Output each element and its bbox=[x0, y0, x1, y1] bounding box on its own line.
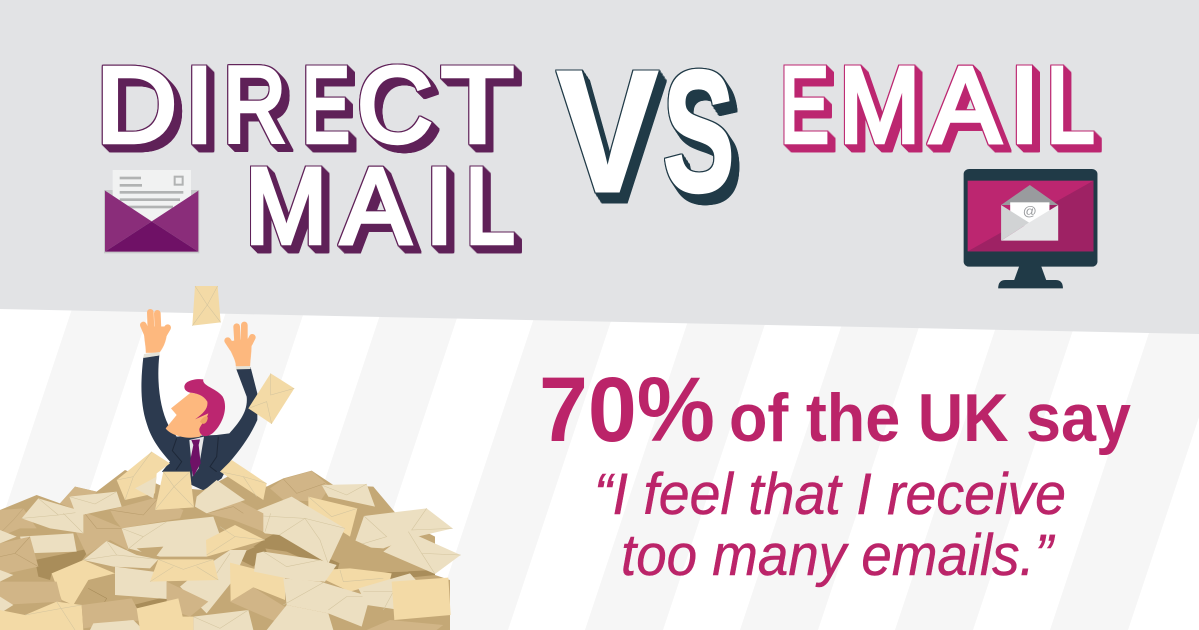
heading: DIRECT MAIL: E bbox=[302, 44, 349, 164]
icon: monitor with email envelope bbox=[964, 169, 1097, 288]
statistic: 70% of the UK say: 70% bbox=[539, 359, 715, 461]
heading: VS: S bbox=[663, 34, 735, 228]
falling envelope right bbox=[248, 373, 294, 424]
heading: DIRECT MAIL: M bbox=[245, 144, 327, 266]
heading: DIRECT MAIL: I bbox=[184, 44, 213, 164]
statistic: 70% of the UK say: of the UK say bbox=[729, 380, 1131, 456]
statistic: 70% of the UK say bbox=[539, 359, 1131, 461]
heading: VS: V bbox=[557, 34, 658, 228]
man bbox=[141, 312, 257, 491]
heading: DIRECT MAIL: R bbox=[223, 44, 286, 164]
heading: EMAIL: M bbox=[839, 44, 920, 164]
pile of envelopes bbox=[0, 452, 461, 630]
heading: EMAIL: E bbox=[780, 44, 829, 164]
quote text: “I feel that I receive bbox=[594, 462, 1066, 527]
heading: DIRECT MAIL: L bbox=[464, 144, 514, 266]
heading: EMAIL: I bbox=[1009, 44, 1040, 164]
heading: DIRECT MAIL: A bbox=[340, 144, 410, 266]
heading: DIRECT MAIL bbox=[96, 44, 522, 266]
heading: EMAIL: A bbox=[930, 44, 1000, 164]
heading: DIRECT MAIL: D bbox=[96, 44, 177, 164]
falling envelope top bbox=[192, 286, 221, 326]
heading: DIRECT MAIL: T bbox=[440, 44, 513, 164]
icon: paper envelope with letter bbox=[104, 170, 199, 253]
heading: DIRECT MAIL: C bbox=[357, 44, 433, 164]
heading: DIRECT MAIL: I bbox=[424, 144, 453, 266]
icon: monitor with email envelope: @ bbox=[1023, 204, 1037, 218]
quote text: too many emails.” bbox=[621, 523, 1056, 588]
heading: VS bbox=[555, 34, 740, 228]
heading: EMAIL bbox=[780, 44, 1102, 164]
illustration: man sinking in envelopes bbox=[0, 286, 461, 630]
heading: EMAIL: L bbox=[1046, 44, 1094, 164]
quote text bbox=[594, 462, 1066, 588]
